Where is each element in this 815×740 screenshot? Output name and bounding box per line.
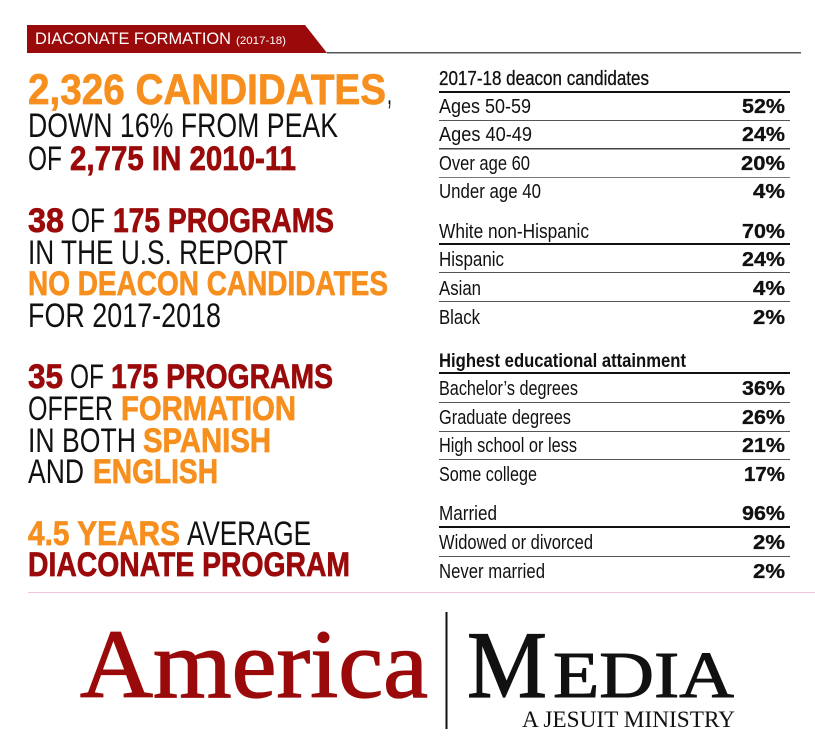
- table: education: 17%: [744, 464, 785, 486]
- table: race and ethnicity: Asian: [439, 278, 481, 300]
- stat: candidates: [28, 66, 392, 178]
- stat: programs with no candidates: IN THE U.S. REPORT: [28, 234, 288, 272]
- stat: candidates: 2,326 CANDIDATES: [28, 66, 386, 114]
- stat: candidates: OF: [28, 140, 62, 178]
- table: marital status: [439, 503, 790, 583]
- stat: programs with no candidates: OF: [71, 202, 105, 240]
- table: education: Graduate degrees: [439, 407, 571, 429]
- stat: bilingual formation: AND: [28, 453, 84, 491]
- table: race and ethnicity: Black: [439, 307, 481, 329]
- table: age: 20%: [741, 153, 785, 175]
- table: race and ethnicity: Hispanic: [439, 249, 504, 271]
- table: education: Highest educational attainment: [439, 351, 687, 372]
- table: education: Some college: [439, 464, 537, 486]
- stat: bilingual formation: ENGLISH: [93, 453, 218, 491]
- table: marital status: 2%: [753, 561, 785, 583]
- stat: program length: AVERAGE: [187, 515, 311, 553]
- stat: candidates: DOWN 16% FROM PEAK: [28, 107, 338, 145]
- stat: bilingual formation: 35: [28, 358, 63, 396]
- logo: America Media: America: [80, 611, 428, 718]
- table: education: 21%: [742, 435, 785, 457]
- stat: program length: [28, 515, 350, 584]
- stat: bilingual formation: 175 PROGRAMS: [111, 358, 333, 396]
- table: marital status: Never married: [439, 561, 545, 583]
- stat: bilingual formation: OF: [70, 358, 104, 396]
- logo: America Media: A JESUIT MINISTRY: [522, 707, 735, 732]
- table: marital status: Widowed or divorced: [439, 532, 593, 554]
- table: marital status: 2%: [753, 532, 785, 554]
- table: race and ethnicity: 2%: [753, 307, 785, 329]
- table: race and ethnicity: 4%: [753, 278, 785, 300]
- table: education: 36%: [742, 378, 785, 400]
- table: education: [439, 351, 790, 486]
- table: age: Over age 60: [439, 153, 530, 175]
- table: age: 4%: [753, 181, 785, 203]
- table: race and ethnicity: 24%: [742, 249, 785, 271]
- stat: program length: 4.5 YEARS: [28, 515, 180, 553]
- table: race and ethnicity: 70%: [742, 221, 785, 243]
- table: age: Ages 40-49: [439, 124, 532, 146]
- table: age: Under age 40: [439, 181, 541, 203]
- logo: America Media: [80, 611, 735, 732]
- table: age: [439, 68, 790, 203]
- stat: bilingual formation: IN BOTH: [28, 422, 136, 460]
- logo: America Media: EDIA: [553, 639, 734, 712]
- table: marital status: Married: [439, 503, 497, 525]
- table: age: 24%: [742, 124, 785, 146]
- table: education: 26%: [742, 407, 785, 429]
- header banner: DIACONATE FORMATION: [35, 29, 231, 48]
- logo: America Media: M: [467, 612, 547, 718]
- stat: bilingual formation: [28, 358, 333, 491]
- header banner: [27, 25, 801, 54]
- stat: bilingual formation: SPANISH: [143, 422, 271, 460]
- stat: bilingual formation: FORMATION: [121, 390, 296, 428]
- stat: programs with no candidates: 38: [28, 202, 64, 240]
- header banner: (2017-18): [236, 35, 286, 47]
- table: age: 52%: [742, 96, 785, 118]
- table: age: Ages 50-59: [439, 96, 531, 118]
- table: education: High school or less: [439, 435, 577, 457]
- table: race and ethnicity: White non-Hispanic: [439, 221, 589, 243]
- table: race and ethnicity: [439, 221, 790, 329]
- stat: candidates: ,: [387, 74, 392, 112]
- stat: programs with no candidates: [28, 202, 388, 335]
- stat: programs with no candidates: FOR 2017-2018: [28, 297, 221, 335]
- table: education: Bachelor’s degrees: [439, 378, 578, 400]
- stat: programs with no candidates: 175 PROGRAMS: [113, 202, 334, 240]
- stat: program length: DIACONATE PROGRAM: [28, 546, 350, 584]
- table: marital status: 96%: [742, 503, 785, 525]
- table: age: 2017-18 deacon candidates: [439, 68, 649, 90]
- stat: bilingual formation: OFFER: [28, 390, 113, 428]
- stat: programs with no candidates: NO DEACON CANDIDATES: [28, 265, 388, 303]
- stat: candidates: 2,775 IN 2010-11: [70, 140, 296, 178]
